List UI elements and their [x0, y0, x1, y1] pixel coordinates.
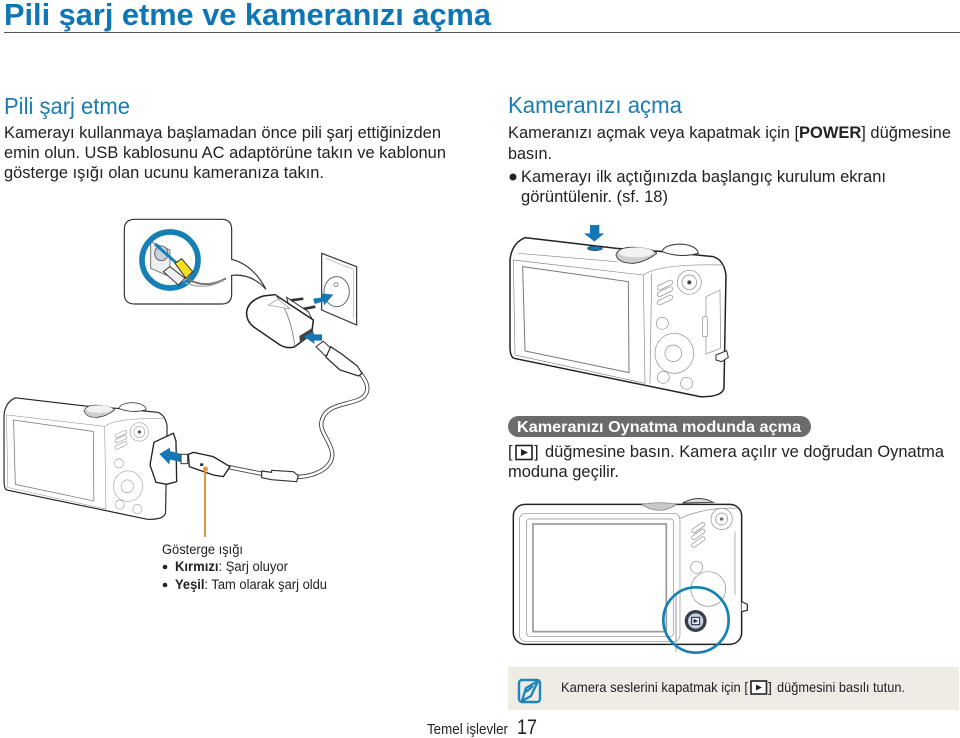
illustration: camera connected to cable — [4, 398, 298, 519]
camera body — [510, 238, 726, 397]
footer page label — [427, 716, 537, 738]
indicator light legend — [162, 542, 327, 592]
illustration: camera power button — [510, 225, 728, 397]
power on instructions: Kameranızı açmak veya kapatmak için [POWER] düğmesine — [508, 124, 951, 142]
micro usb plug — [181, 452, 230, 477]
arrow: into adapter — [304, 331, 322, 344]
playback mode text — [508, 443, 945, 481]
playback mode text: moduna geçilir. — [508, 463, 619, 481]
note text — [561, 679, 905, 695]
note text: Kamera seslerini kapatmak için [ — [561, 679, 748, 695]
playback mode text: ] — [534, 443, 539, 461]
indicator light legend: Yeşil: Tam olarak şarj oldu — [175, 577, 327, 592]
illustration: camera playback button — [513, 498, 747, 653]
cable — [228, 373, 367, 477]
open port door — [150, 433, 177, 484]
callout: plug detail — [124, 219, 266, 304]
arrow: into socket — [313, 293, 333, 305]
playback mode text: düğmesine basın. Kamera açılır ve doğrudan Oynatma — [545, 443, 945, 461]
wall socket — [322, 253, 357, 325]
section: charging text — [4, 93, 446, 182]
camera body — [513, 498, 747, 644]
power button — [588, 246, 602, 251]
lens and controls — [691, 508, 732, 606]
usb plug — [316, 341, 362, 376]
playback mode heading pill: Kameranızı Oynatma modunda açma — [517, 419, 801, 436]
charging instructions — [4, 124, 446, 182]
note text: düğmesini basılı tutun. — [777, 679, 905, 695]
icon: playback key — [516, 446, 532, 460]
charger adapter — [247, 295, 315, 348]
camera body — [4, 398, 167, 519]
indicator light legend: Kırmızı: Şarj oluyor — [175, 559, 288, 574]
indicator leader line — [204, 468, 206, 537]
charging instructions: Kamerayı kullanmaya başlamadan önce pili şarj ettiğinizden — [4, 124, 441, 142]
charging instructions: emin olun. USB kablosunu AC adaptörüne takın ve kablonun — [4, 144, 446, 162]
controls — [655, 270, 728, 389]
arrow: press power — [584, 225, 604, 242]
highlight circle with playback button — [663, 587, 729, 653]
mode dial — [616, 244, 698, 263]
illustration: charger and wall socket — [124, 219, 362, 376]
icon: note pencil — [519, 680, 540, 702]
power on instructions — [508, 124, 951, 206]
ferrite core — [262, 470, 298, 482]
section: power on text — [508, 92, 951, 206]
footer page label: Temel işlevler — [427, 721, 508, 738]
playback mode text: [ — [508, 443, 513, 461]
note text: ] — [768, 679, 772, 695]
heading: power on: Kameranızı açma — [508, 92, 682, 118]
heading: charging: Pili şarj etme — [4, 93, 130, 119]
arrow: into camera — [159, 448, 185, 464]
charging instructions: gösterge ışığı olan ucunu kameranıza takın. — [4, 164, 324, 182]
power on instructions: görüntülenir. (sf. 18) — [521, 188, 668, 206]
note bar — [508, 667, 959, 710]
power on instructions: basın. — [508, 145, 552, 163]
indicator light legend: Gösterge ışığı — [162, 542, 243, 557]
power on instructions: Kamerayı ilk açtığınızda başlangıç kurulum ekranı — [521, 168, 886, 186]
